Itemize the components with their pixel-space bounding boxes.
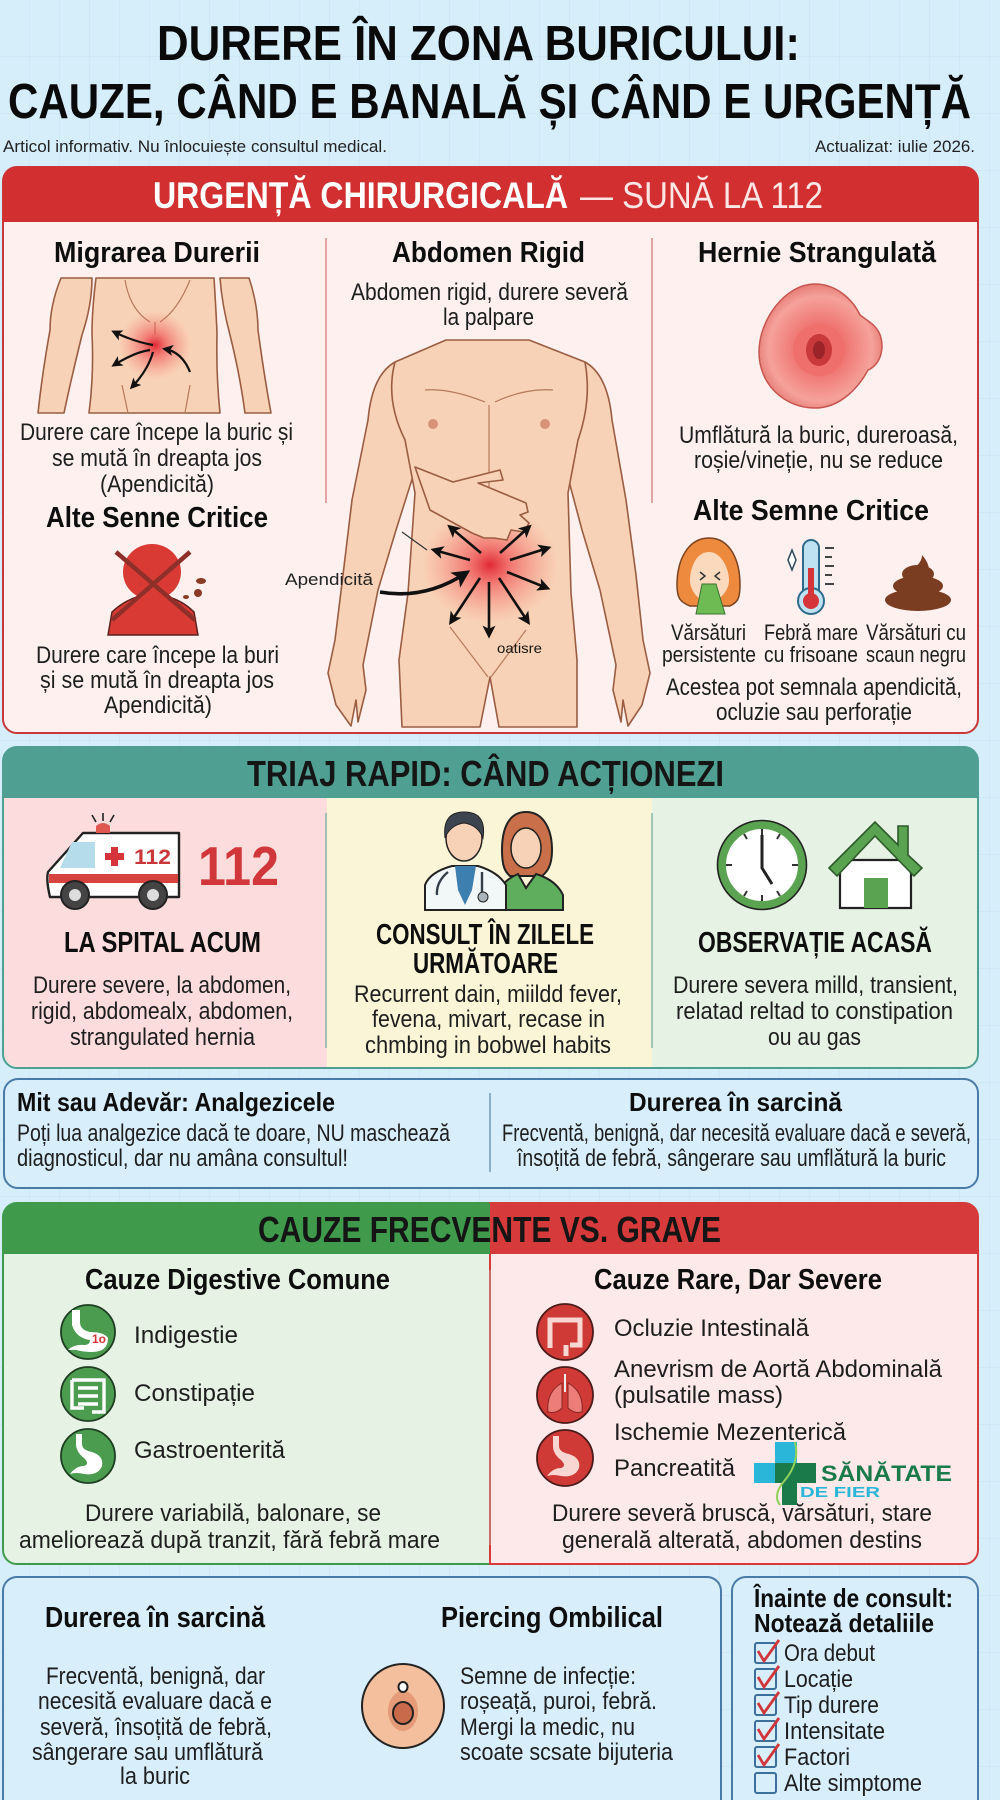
left arm [328, 362, 415, 726]
column: home observation [673, 820, 958, 1051]
heading: checklist [752, 1583, 953, 1638]
icon: constipation [61, 1367, 115, 1421]
text: pregnancy: Frecventă, benignă, dar [46, 1663, 265, 1690]
text: myth: Poți lua analgezice dacă te doare, NU maschează [17, 1120, 451, 1147]
text: pregnancy: la buric [120, 1763, 190, 1790]
text: piercing: Semne de infecție: [460, 1663, 636, 1690]
panel: quick triage [3, 747, 978, 1068]
text: pain migration: se mută în dreapta jos [52, 445, 262, 472]
icon: clock [718, 820, 806, 910]
text: severe causes [552, 1500, 932, 1554]
icon: lungs [537, 1367, 593, 1423]
heading: checklist: Înainte de consult: [752, 1583, 953, 1613]
text: vomiting [662, 620, 756, 667]
text: piercing [460, 1663, 674, 1766]
checklist items: Alte simptome [784, 1770, 922, 1797]
icon: crossed person [108, 544, 206, 635]
text: pregnancy [502, 1120, 971, 1172]
label: gastroenteritis: Gastroenterită [134, 1437, 286, 1464]
panel: pregnancy and piercing [3, 1577, 721, 1800]
text: pregnancy [32, 1663, 272, 1790]
heading: consult: URMĂTOARE [413, 947, 558, 980]
text: signs summary: ocluzie sau perforație [716, 699, 912, 726]
checklist items: Intensitate [784, 1718, 885, 1745]
icon: indigestion: 1o [92, 1332, 106, 1346]
text: common causes: Durere variabilă, balonare, se [85, 1500, 381, 1527]
text: observation: relatad reltad to constipation [676, 998, 953, 1025]
checklist items: Locație [784, 1666, 853, 1693]
heading: checklist: Notează detaliile [754, 1608, 934, 1638]
label: aneurysm: Anevrism de Aortă Abdominală [614, 1356, 943, 1383]
label: aneurysm [614, 1356, 943, 1409]
text: other signs left: și se mută în dreapta jos [40, 667, 274, 694]
text: vomiting: persistente [662, 642, 756, 667]
text: other signs left [36, 642, 279, 719]
heading: pregnancy: Durerea în sarcină [45, 1602, 266, 1634]
text: fever [764, 620, 858, 667]
heading: consult [376, 917, 594, 980]
text: observation: Durere severa milld, transient, [673, 972, 958, 999]
icon: gastroenteritis [61, 1429, 115, 1483]
text: rigid abdomen [351, 279, 629, 331]
label: occlusion: Ocluzie Intestinală [614, 1315, 810, 1342]
text: hernia [679, 422, 958, 474]
label: indigestion: Indigestie [134, 1322, 238, 1349]
heading: rigid abdomen: Abdomen Rigid [392, 237, 585, 269]
logo: SĂNĂTATE [821, 1461, 952, 1486]
text: myth: diagnosticul, dar nu amâna consultul! [17, 1145, 348, 1172]
column: consult [327, 798, 652, 1067]
text: signs summary [666, 674, 962, 726]
right arm [566, 362, 650, 726]
heading: observation: OBSERVAȚIE ACASĂ [698, 926, 932, 959]
text: pregnancy: necesită evaluare dacă e [38, 1688, 272, 1715]
text: pregnancy: sângerare sau umflătură [32, 1739, 264, 1766]
text: hospital: Durere severe, la abdomen, [33, 972, 291, 999]
heading: other signs right: Alte Semne Critice [693, 495, 929, 527]
panel: surgical emergency [3, 167, 978, 733]
text: consult: Recurrent dain, miildd fever, [354, 981, 622, 1008]
panel: myth and pregnancy [4, 1079, 978, 1188]
text: pain migration [20, 419, 293, 498]
update date: Actualizat: iulie 2026. [815, 137, 975, 156]
text: severe causes: Durere severă bruscă, vărsături, stare [552, 1500, 932, 1527]
icon: stomach [537, 1430, 593, 1486]
checklist items: Ora debut [784, 1640, 875, 1667]
label: pancreatitis: Pancreatită [614, 1455, 736, 1482]
illustration: small torso with arrows [38, 278, 271, 413]
heading: piercing: Piercing Ombilical [441, 1602, 663, 1634]
text: pain migration: (Apendicită) [100, 471, 214, 498]
checklist items [784, 1640, 922, 1797]
text: black stool [866, 620, 966, 667]
label: appendicitis: Apendicită [285, 570, 374, 589]
text: consult [354, 981, 622, 1059]
panel header: emergency: — SUNĂ LA 112 [580, 175, 823, 216]
icon: indigestion [61, 1305, 115, 1359]
panel header: triage [3, 747, 978, 798]
heading: common causes: Cauze Digestive Comune [85, 1264, 390, 1296]
label: ischemia: Ischemie Mezenterică [614, 1419, 847, 1446]
text: other signs left: Durere care începe la buri [36, 642, 279, 669]
icon: doctors [425, 812, 563, 910]
text: hernia: Umflătură la buric, dureroasă, [679, 422, 958, 449]
panel header: emergency: URGENȚĂ CHIRURGICALĂ [153, 175, 568, 217]
heading: pain migration: Migrarea Durerii [54, 237, 260, 269]
torso [392, 340, 587, 727]
column: hospital now [4, 798, 327, 1067]
text: piercing: Mergi la medic, nu [460, 1714, 635, 1741]
panel header: causes [3, 1203, 978, 1254]
panel header: triage: TRIAJ RAPID: CÂND ACȚIONEZI [247, 752, 724, 794]
illustration: hernia [759, 284, 882, 408]
checkboxes [755, 1640, 779, 1793]
panel: common vs severe causes [3, 1203, 978, 1564]
heading: rare causes: Cauze Rare, Dar Severe [594, 1264, 882, 1296]
panel header: causes: CAUZE FRECVENTE VS. GRAVE [258, 1209, 721, 1250]
icon: house [829, 822, 922, 908]
icon: thermometer [788, 540, 834, 614]
text: hospital: strangulated hernia [70, 1024, 256, 1051]
heading: strangulated hernia: Hernie Strangulată [698, 237, 937, 269]
icon: ambulance [47, 813, 179, 909]
text: pregnancy: severă, însoțită de febră, [40, 1714, 272, 1741]
logo: DE FIER [800, 1484, 880, 1501]
text: consult: chmbing in bobwel habits [365, 1032, 611, 1059]
number: 112: 112 [198, 835, 279, 897]
text: other signs left: Apendicită) [104, 692, 212, 719]
text: hospital [31, 972, 293, 1051]
text: black stool: Vărsături cu [866, 620, 966, 645]
icon: black stool [885, 555, 951, 611]
text: hospital: rigid, abdomealx, abdomen, [31, 998, 293, 1025]
text: common causes: ameliorează după tranzit, fără febră mare [19, 1527, 440, 1554]
icon: vomiting woman [677, 538, 740, 614]
heading: myth: Mit sau Adevăr: Analgezicele [17, 1087, 335, 1117]
disclaimer: Articol informativ. Nu înlocuiește consultul medical. [3, 137, 387, 156]
title: DURERE ÎN ZONA BURICULUI: [157, 16, 800, 71]
icon: ambulance: 112 [134, 846, 171, 869]
label: small body note: oatisre [497, 640, 542, 656]
text: hernia: roșie/vinețiе, nu se reduce [694, 447, 943, 474]
label: aneurysm: (pulsatile mass) [614, 1382, 783, 1409]
panel header: emergency [3, 167, 978, 222]
text: pain migration: Durere care începe la buric și [20, 419, 293, 446]
text: piercing: scoate scsate bijuteria [460, 1739, 674, 1766]
checklist items: Tip durere [784, 1692, 879, 1719]
text: fever: cu frisoane [764, 642, 858, 667]
heading: other signs left: Alte Senne Critice [46, 502, 268, 534]
checklist items: Factori [784, 1744, 850, 1771]
illustration: central body [328, 340, 650, 727]
text: rigid abdomen: la palpare [443, 304, 534, 331]
text: severe causes: generală alterată, abdomen destins [562, 1527, 922, 1554]
text: piercing: roșeață, puroi, febră. [460, 1688, 657, 1715]
heading: hospital: LA SPITAL ACUM [64, 927, 261, 959]
icon: navel piercing [362, 1664, 444, 1748]
logo [754, 1442, 952, 1505]
heading: consult: CONSULT ÎN ZILELE [376, 917, 594, 951]
text: vomiting: Vărsături [671, 620, 746, 645]
icon: intestine [537, 1304, 593, 1360]
title [8, 16, 971, 129]
hand on abdomen [415, 467, 529, 540]
heading: pregnancy: Durerea în sarcină [629, 1087, 843, 1117]
text: observation [673, 972, 958, 1051]
panel: checklist [732, 1577, 978, 1800]
text: black stool: scaun negru [866, 642, 966, 667]
text: rigid abdomen: Abdomen rigid, durere severă [351, 279, 629, 306]
text: consult: fevena, mivart, recase in [372, 1006, 605, 1033]
text: fever: Febră mare [764, 620, 858, 645]
text: myth [17, 1120, 451, 1172]
text: observation: ou au gas [768, 1024, 861, 1051]
text: common causes [19, 1500, 440, 1554]
label: constipation: Constipație [134, 1380, 255, 1407]
